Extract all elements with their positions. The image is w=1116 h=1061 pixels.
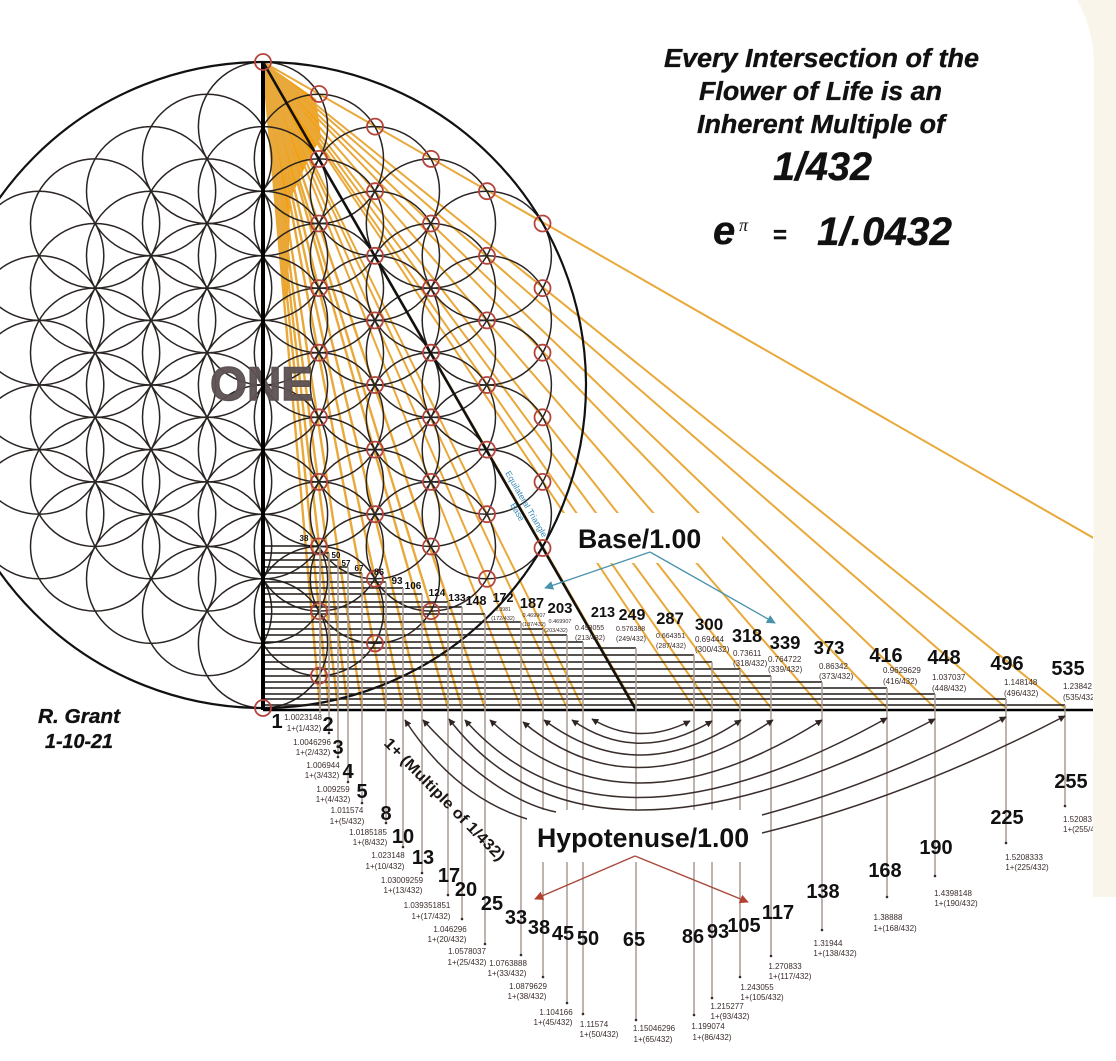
hypotenuse value labels: 1.009259 xyxy=(316,785,350,794)
hypotenuse value labels: 1+(33/432) xyxy=(488,969,527,978)
hypotenuse value labels: 1.243055 xyxy=(740,983,774,992)
hypotenuse value labels: 1.0023148 xyxy=(284,713,322,722)
base fraction labels: 0.764722 xyxy=(768,655,802,664)
base fraction labels: 448 xyxy=(927,647,961,669)
hypotenuse value labels: 3 xyxy=(332,737,344,759)
hypotenuse value labels: 1+(2/432) xyxy=(296,748,331,757)
curved arrows linking base to hypotenuse xyxy=(405,716,1065,833)
hypotenuse value labels: 1+(105/432) xyxy=(740,993,784,1002)
rotated multiple note: 1+ (Multiple of 1/432) xyxy=(380,735,508,865)
base numbers small cluster: 38 xyxy=(300,534,309,543)
base fraction labels: (300/432) xyxy=(695,645,730,654)
hypotenuse value labels: 4 xyxy=(342,761,354,783)
hypotenuse value labels: 1 xyxy=(271,711,283,733)
hypotenuse value labels: 168 xyxy=(868,860,902,882)
base fraction labels: 0.69444 xyxy=(695,635,724,644)
base numbers small cluster: 148 xyxy=(466,594,486,608)
author credit: 1-10-21 xyxy=(45,731,113,753)
hypotenuse value labels: 1.046296 xyxy=(433,925,467,934)
hypotenuse value labels: 13 xyxy=(412,847,434,869)
base fraction labels: 0.664351 xyxy=(656,633,685,640)
equation e^pi = 1/.0432 xyxy=(713,209,952,254)
hypotenuse arrows xyxy=(535,856,748,902)
hypotenuse value labels: 1.11574 xyxy=(580,1020,609,1029)
base line xyxy=(263,709,1093,711)
hypotenuse value labels: 1.0185185 xyxy=(349,828,387,837)
equation e^pi = 1/.0432: e xyxy=(713,209,735,253)
base numbers small cluster: 106 xyxy=(405,581,422,592)
author credit xyxy=(38,706,121,753)
hypotenuse value labels: 93 xyxy=(707,921,729,943)
hypotenuse value labels: 1.31944 xyxy=(814,939,843,948)
clipped right-edge labels: 255 xyxy=(1054,771,1088,793)
vertical axis line xyxy=(261,62,265,710)
hypotenuse value labels: 10 xyxy=(392,826,414,848)
Base/1.00 label: Base/1.00 xyxy=(578,524,701,554)
base fraction labels: 416 xyxy=(869,645,903,667)
hypotenuse value labels: 1+(25/432) xyxy=(448,958,487,967)
equilateral triangle side xyxy=(263,62,636,710)
hypotenuse value labels: 1+(190/432) xyxy=(934,899,978,908)
hypotenuse value labels: 1.039351851 xyxy=(404,901,451,910)
hypotenuse value labels: 65 xyxy=(623,929,645,951)
equation e^pi = 1/.0432: = xyxy=(773,222,787,249)
hypotenuse value labels: 117 xyxy=(762,902,794,924)
base arrows xyxy=(545,552,775,623)
base fraction labels xyxy=(491,591,1039,698)
equation e^pi = 1/.0432: π xyxy=(739,215,749,235)
hypotenuse value labels: 2 xyxy=(322,714,334,736)
hypotenuse value labels: 1+(10/432) xyxy=(366,862,405,871)
base fraction labels: (318/432) xyxy=(733,659,768,668)
hypotenuse value labels: 20 xyxy=(455,879,477,901)
hypotenuse value labels: 8 xyxy=(380,803,392,825)
hypotenuse value labels: 1+(50/432) xyxy=(580,1030,619,1039)
base fraction labels: 203 xyxy=(547,600,573,617)
base fraction labels: 0.3981 xyxy=(495,607,511,613)
hypotenuse value labels: 1.0763888 xyxy=(489,959,527,968)
base fraction labels: 1.148148 xyxy=(1004,678,1038,687)
clipped right-edge labels: 1.23842 xyxy=(1063,682,1092,691)
hypotenuse value labels: 5 xyxy=(356,781,368,803)
horizontal scale lines xyxy=(263,546,1065,705)
title block: Flower of Life is an xyxy=(699,78,942,106)
base fraction labels: 249 xyxy=(619,607,645,624)
hypotenuse value labels: 1.5208333 xyxy=(1005,853,1043,862)
hypotenuse value labels: 1.011574 xyxy=(331,806,364,815)
hypotenuse value labels: 190 xyxy=(919,837,953,859)
hypotenuse value labels: 138 xyxy=(806,881,840,903)
base numbers small cluster: 57 xyxy=(342,559,351,568)
base fraction labels: 318 xyxy=(732,626,762,646)
hypotenuse value labels: 25 xyxy=(481,893,503,915)
orange fan of lines from apex to base points xyxy=(263,62,1116,708)
hypotenuse value labels: 17 xyxy=(438,865,460,887)
hypotenuse value labels: 1+(4/432) xyxy=(316,795,351,804)
hypotenuse value labels: 1+(8/432) xyxy=(353,838,388,847)
base fraction labels: 0.73611 xyxy=(733,649,762,658)
base fraction labels: (213/432) xyxy=(575,635,605,642)
hypotenuse value labels: 1+(168/432) xyxy=(873,924,917,933)
base fraction labels: 0.469907 xyxy=(549,619,571,625)
hypotenuse value labels: 1+(138/432) xyxy=(813,949,857,958)
vertical drop lines from base to hypotenuse values xyxy=(320,546,1065,1020)
hypotenuse value labels: 1+(20/432) xyxy=(428,935,467,944)
hypotenuse value labels: 1+(13/432) xyxy=(384,886,423,895)
clipped right-edge labels: 535 xyxy=(1051,658,1085,680)
hypotenuse value labels: 1.006944 xyxy=(306,761,340,770)
hypotenuse value labels: 50 xyxy=(577,928,599,950)
base fraction labels: 339 xyxy=(770,632,800,653)
base fraction labels: (187/432) xyxy=(522,622,546,628)
Hypotenuse/1.00 label: Hypotenuse/1.00 xyxy=(537,823,749,853)
hypotenuse value labels: 1+(38/432) xyxy=(508,992,547,1001)
base fraction labels: (287/432) xyxy=(656,643,686,650)
title block: Every Intersection of the xyxy=(664,45,979,73)
base fraction labels: 213 xyxy=(591,605,615,621)
equilateral triangle base note: Equilateral Triangle xyxy=(503,469,550,539)
equation e^pi = 1/.0432: 1/.0432 xyxy=(817,210,952,254)
title block: Inherent Multiple of xyxy=(697,111,948,139)
base fraction labels: 496 xyxy=(990,653,1024,675)
hypotenuse value labels: 1.03009259 xyxy=(381,876,424,885)
base fraction labels: (373/432) xyxy=(819,672,854,681)
hypotenuse value labels: 86 xyxy=(682,926,704,948)
hypotenuse value labels: 1+(86/432) xyxy=(693,1033,732,1042)
hypotenuse value labels: 1.023148 xyxy=(371,851,405,860)
hypotenuse value labels: 1.4398148 xyxy=(934,889,972,898)
hypotenuse value labels: 1+(1/432) xyxy=(287,724,322,733)
hypotenuse value labels xyxy=(271,711,1049,1044)
hypotenuse value labels: 1.199074 xyxy=(691,1022,725,1031)
hypotenuse value labels: 1.104166 xyxy=(539,1008,573,1017)
ONE label: ONE xyxy=(210,358,313,411)
clipped right-edge labels: 1.52083 xyxy=(1063,815,1092,824)
hypotenuse value labels: 45 xyxy=(552,923,574,945)
base fraction labels: (339/432) xyxy=(768,665,803,674)
clipped right-edge labels: (535/432) xyxy=(1063,693,1098,702)
base fraction labels: 0.493055 xyxy=(575,625,604,632)
base fraction labels: 373 xyxy=(814,637,844,658)
title block xyxy=(664,45,979,189)
hypotenuse value labels: 105 xyxy=(727,915,761,937)
hypotenuse value labels: 1+(45/432) xyxy=(534,1018,573,1027)
base numbers small cluster: 93 xyxy=(391,576,403,587)
equilateral triangle base note: Base xyxy=(508,501,527,523)
author credit: R. Grant xyxy=(38,706,121,728)
hypotenuse value labels: 1+(65/432) xyxy=(634,1035,673,1044)
base numbers small cluster: 50 xyxy=(332,551,341,560)
hypotenuse value labels: 1.38888 xyxy=(874,913,903,922)
hypotenuse value labels: 225 xyxy=(990,807,1024,829)
enclosing big circle xyxy=(0,62,586,708)
flower of life circles xyxy=(0,62,551,708)
clipped right-edge labels xyxy=(1052,661,1093,834)
base numbers small cluster: 124 xyxy=(429,588,446,599)
clipped right-edge labels: 1+(255/432) xyxy=(1063,825,1107,834)
base fraction labels: 0.86342 xyxy=(819,662,848,671)
base numbers small cluster: 133 xyxy=(448,592,466,604)
base numbers small cluster: 86 xyxy=(374,567,384,577)
hypotenuse value labels: 1.270833 xyxy=(768,962,802,971)
base fraction labels: 172 xyxy=(493,591,513,605)
base fraction labels: 0.9629629 xyxy=(883,666,921,675)
hypotenuse value labels: 1+(93/432) xyxy=(711,1012,750,1021)
hypotenuse value labels: 1+(225/432) xyxy=(1005,863,1049,872)
base fraction labels: (172/432) xyxy=(491,616,515,622)
hypotenuse value labels: 1+(17/432) xyxy=(412,912,451,921)
hypotenuse value labels: 1.215277 xyxy=(710,1002,744,1011)
title block: 1/432 xyxy=(773,145,872,189)
hypotenuse value labels: 33 xyxy=(505,907,527,929)
hypotenuse value labels: 1+(3/432) xyxy=(305,771,340,780)
base fraction labels: (203/432) xyxy=(544,628,568,634)
base fraction labels: 287 xyxy=(656,610,684,628)
hypotenuse value labels: 1.0879629 xyxy=(509,982,547,991)
base fraction labels: 0.576388 xyxy=(616,626,645,633)
base fraction labels: 187 xyxy=(520,596,544,612)
base fraction labels: 300 xyxy=(695,615,723,634)
hypotenuse value labels: 1.0578037 xyxy=(448,947,486,956)
hypotenuse value labels: 1.0046296 xyxy=(293,738,331,747)
hypotenuse value labels: 1+(117/432) xyxy=(769,972,812,981)
base fraction labels: (416/432) xyxy=(883,677,918,686)
base fraction labels: 0.469907 xyxy=(523,613,545,619)
hypotenuse value labels: 38 xyxy=(528,917,550,939)
base numbers small cluster xyxy=(300,534,486,608)
hypotenuse value labels: 1+(5/432) xyxy=(330,817,365,826)
base fraction labels: (448/432) xyxy=(932,684,967,693)
hypotenuse value labels: 1.15046296 xyxy=(633,1024,676,1033)
base fraction labels: (496/432) xyxy=(1004,689,1039,698)
base numbers small cluster: 67 xyxy=(355,564,364,573)
base fraction labels: 1.037037 xyxy=(932,673,966,682)
red intersection markers xyxy=(255,54,550,716)
base fraction labels: (249/432) xyxy=(616,636,646,643)
